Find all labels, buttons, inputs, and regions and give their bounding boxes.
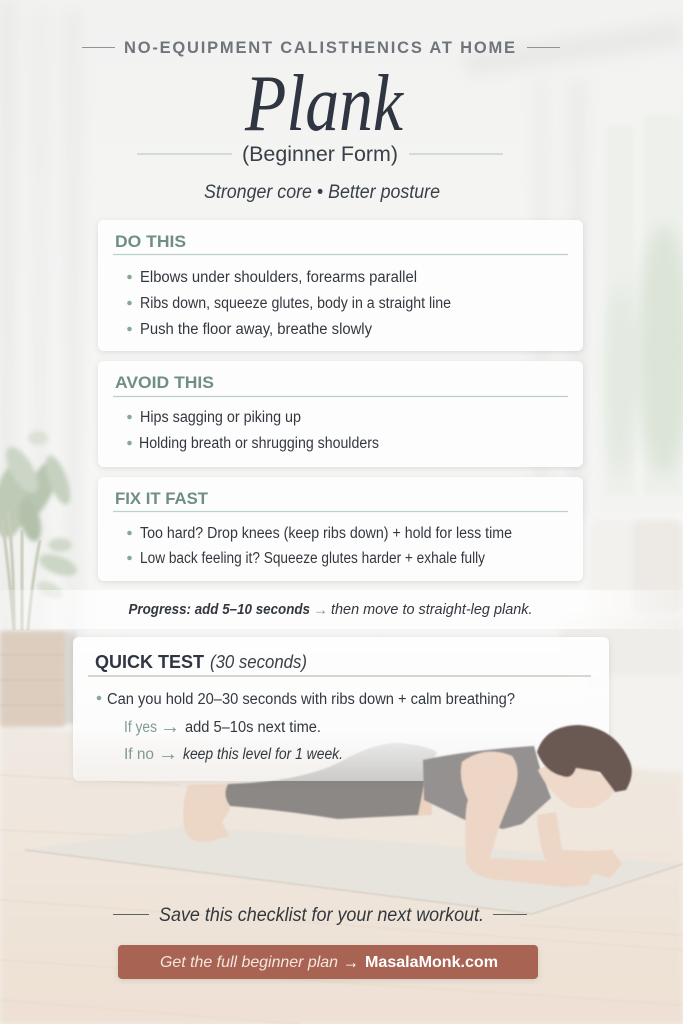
face and neck <box>538 763 618 808</box>
if yes: add 5–10s next time. <box>185 719 321 736</box>
panel: avoid this <box>98 361 583 467</box>
heading: quick test <box>95 651 307 672</box>
list: fix it fast: Low back feeling it? Squeeze glutes harder + exhale fully <box>140 550 485 567</box>
list: avoid this: Holding breath or shrugging shoulders <box>139 435 379 452</box>
heading: quick test: (30 seconds) <box>210 652 307 672</box>
dark gap behind quick test <box>60 632 76 724</box>
heading: do this: DO THIS <box>115 232 186 251</box>
progress band: Progress: add 5–10 seconds <box>128 601 310 618</box>
sofa <box>560 518 683 770</box>
if yes: → <box>160 716 180 738</box>
hair <box>537 725 632 792</box>
subtitle: (Beginner Form) <box>242 143 398 166</box>
floor <box>0 726 683 1024</box>
title: Plank <box>244 60 404 148</box>
if yes: If yes <box>124 719 157 736</box>
list: fix it fast: Too hard? Drop knees (keep ribs down) + hold for less time <box>140 525 512 542</box>
strap <box>506 750 535 822</box>
midriff <box>402 754 432 816</box>
question: Can you hold 20–30 seconds with ribs down + calm breathing? <box>107 691 515 708</box>
panel: do this <box>98 220 583 351</box>
panel: quick test <box>73 637 609 781</box>
window <box>596 105 683 515</box>
leggings <box>225 743 437 819</box>
list: avoid this: Hips sagging or piking up <box>140 409 301 426</box>
illustration: woman's upper body in forearm plank <box>423 725 632 887</box>
illustration: woman's legs behind card <box>183 743 437 842</box>
if yes <box>124 716 321 738</box>
heading: quick test: QUICK TEST <box>95 651 205 672</box>
list: do this: Ribs down, squeeze glutes, body in a straight line <box>140 295 451 312</box>
plant <box>0 431 80 727</box>
feet <box>183 784 230 842</box>
tagline: Stronger core • Better posture <box>204 182 440 203</box>
near arm and shoulder <box>461 752 594 887</box>
eyebrow heading: NO-EQUIPMENT CALISTHENICS AT HOME <box>124 39 515 57</box>
heading: fix it fast: FIX IT FAST <box>115 489 209 508</box>
call to action button: → <box>343 952 359 972</box>
list: fix it fast <box>127 525 512 567</box>
yoga mat <box>25 826 683 914</box>
call to action button: MasalaMonk.com <box>365 954 498 971</box>
tank top <box>423 746 551 829</box>
if no: → <box>158 743 178 765</box>
far arm <box>537 812 622 878</box>
list: do this <box>127 269 451 338</box>
curtains <box>0 0 683 720</box>
list: do this: Elbows under shoulders, forearms parallel <box>140 269 417 286</box>
call to action button: Get the full beginner plan <box>160 954 338 971</box>
heading: avoid this: AVOID THIS <box>115 373 214 392</box>
call to action button <box>118 945 538 979</box>
list: avoid this <box>127 409 379 452</box>
if no: keep this level for 1 week. <box>183 746 343 763</box>
progress band: then move to straight-leg plank. <box>331 601 532 618</box>
panel: fix it fast <box>98 477 583 581</box>
if no: If no <box>124 746 154 763</box>
progress band: → <box>313 600 328 619</box>
list: do this: Push the floor away, breathe slowly <box>140 321 372 338</box>
save line: Save this checklist for your next workout. <box>159 904 484 926</box>
if no <box>124 743 343 765</box>
progress band <box>0 590 683 629</box>
